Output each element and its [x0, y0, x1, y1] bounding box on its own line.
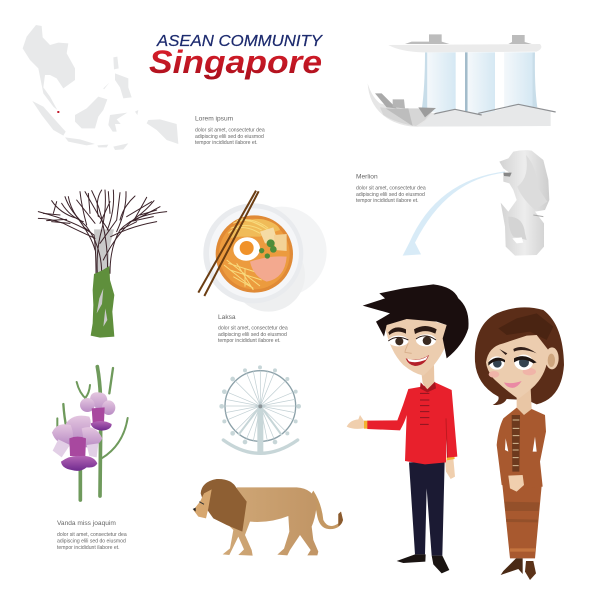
caption: Laksa: [218, 314, 288, 344]
caption: Merlion: tempor incididunt ilabore et.: [356, 198, 419, 204]
caption: Merlion: adipiscing elili sed do eiusmod: [356, 192, 425, 198]
title: ASEAN COMMUNITY: [156, 33, 324, 50]
caption: Vanda miss joaquim: tempor incididunt ilabore et.: [57, 545, 120, 551]
icon: lion: [193, 479, 343, 556]
caption: Merlion: [356, 174, 426, 204]
caption: Laksa: Laksa: [218, 314, 236, 321]
map of Southeast Asia: [23, 25, 178, 150]
caption: Vanda miss joaquim: adipiscing elili sed do eiusmod: [57, 538, 126, 544]
caption: Lorem ipsum: Lorem ipsum: [195, 116, 234, 122]
icon: Supertree: [38, 190, 167, 338]
title: [149, 33, 324, 80]
character: woman in brown dress: [475, 307, 564, 580]
caption: Vanda miss joaquim: [57, 520, 127, 551]
caption: Lorem ipsum: adipiscing elili sed do eiusmod: [195, 134, 264, 140]
caption: Laksa: adipiscing elili sed do eiusmod: [218, 332, 287, 338]
icon: Vanda orchid: [52, 367, 128, 500]
caption: Vanda miss joaquim: Vanda miss joaquim: [57, 520, 116, 527]
title: Singapore: [149, 44, 322, 80]
character: man in red shirt: [347, 284, 469, 573]
caption: Vanda miss joaquim: dolor sit amet, consectetur dea: [57, 532, 127, 538]
icon: Merlion statue with water: [403, 150, 549, 256]
caption: Laksa: dolor sit amet, consectetur dea: [218, 326, 288, 332]
icon: Singapore Flyer: [219, 365, 301, 453]
caption: Lorem ipsum: dolor sit amet, consectetur dea: [195, 128, 265, 134]
icon: laksa bowl: [198, 191, 327, 312]
caption: Merlion: Merlion: [356, 174, 378, 180]
icon: Marina Bay Sands: [368, 34, 556, 127]
caption: Merlion: dolor sit amet, consectetur dea: [356, 186, 426, 192]
caption: Lorem ipsum: tempor incididunt ilabore et.: [195, 140, 258, 146]
caption: Laksa: tempor incididunt ilabore et.: [218, 338, 281, 344]
caption: Lorem ipsum: [195, 116, 265, 146]
